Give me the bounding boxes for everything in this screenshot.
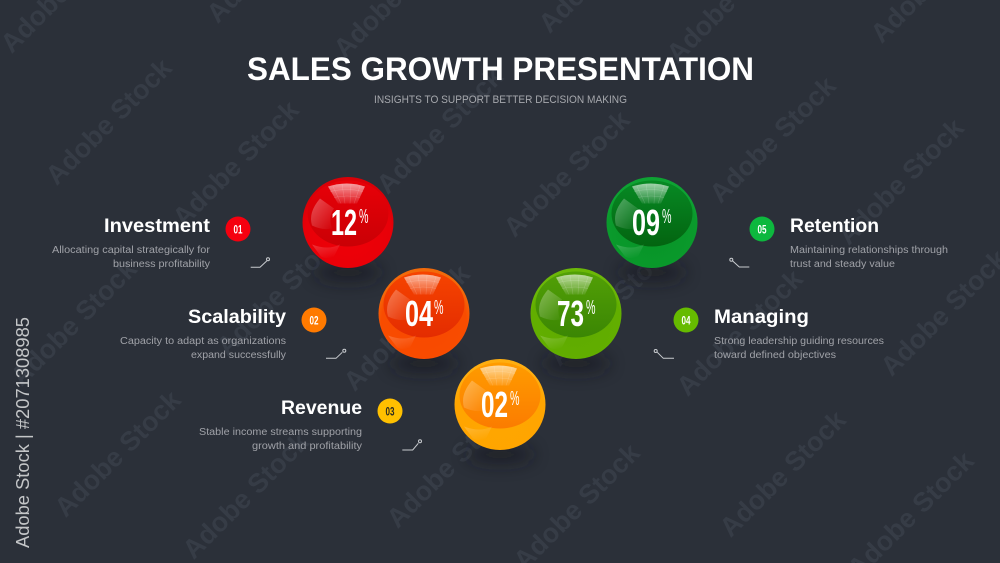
text: retention description <box>790 245 948 270</box>
badge 05 <box>750 216 774 242</box>
sphere: orange 04%: 04 <box>405 293 433 334</box>
sphere: dark green 09%: % <box>662 206 672 228</box>
watermark pattern: Adobe Stock <box>338 258 476 397</box>
subtitle: INSIGHTS TO SUPPORT BETTER DECISION MAKING <box>374 94 627 106</box>
connector 04 <box>654 350 674 358</box>
connector 02 <box>326 349 346 358</box>
sphere: dark green 09% <box>606 177 698 282</box>
badge 03 <box>378 398 402 424</box>
sphere: amber 02%: 02 <box>481 384 508 425</box>
text: managing description <box>714 336 884 361</box>
watermark pattern: Adobe Stock <box>498 104 636 243</box>
watermark pattern: Adobe Stock <box>543 233 681 372</box>
panel: investment <box>52 216 270 270</box>
heading: managing: Managing <box>714 307 809 328</box>
watermark pattern: Adobe Stock <box>177 426 315 563</box>
text: investment description: Allocating capital strategically for <box>52 245 211 256</box>
badge 05: 05 <box>758 222 767 236</box>
sphere: amber 02%: % <box>510 388 520 410</box>
watermark pattern: Adobe Stock <box>371 61 509 200</box>
sphere: lime 73% <box>530 268 622 374</box>
text: scalability description: Capacity to adapt as organizations <box>120 336 286 347</box>
heading: revenue: Revenue <box>281 398 362 419</box>
watermark pattern: Adobe Stock <box>40 52 178 191</box>
text: scalability description <box>120 336 286 361</box>
badge 03: 03 <box>386 404 395 418</box>
text: revenue description: growth and profitability <box>252 441 362 452</box>
panel: retention <box>730 216 948 270</box>
connector 01 <box>251 258 270 267</box>
sphere: red 12%: 12 <box>331 202 357 243</box>
heading: retention: Retention <box>790 216 879 237</box>
sphere: orange 04% <box>378 268 470 374</box>
sphere: amber 02% <box>454 359 546 464</box>
text: managing description: toward defined objectives <box>714 350 836 361</box>
watermark pattern: Adobe Stock <box>832 112 970 251</box>
stock id side label: Adobe Stock | #2071308985 <box>13 317 33 548</box>
watermark pattern: Adobe Stock <box>167 94 305 233</box>
sphere: red 12%: % <box>359 206 369 228</box>
text: retention description: Maintaining relationships through <box>790 245 948 256</box>
title: SALES GROWTH PRESENTATION <box>247 51 754 87</box>
badge 04: 04 <box>682 314 691 328</box>
text: managing description: Strong leadership guiding resources <box>714 336 884 347</box>
watermark pattern: Adobe Stock <box>714 404 852 543</box>
text: investment description: business profitability <box>113 259 210 270</box>
badge 01 <box>226 216 250 242</box>
watermark pattern: Adobe Stock <box>381 395 519 534</box>
text: investment description <box>52 245 211 270</box>
panel: managing <box>654 307 884 361</box>
sphere: dark green 09%: 09 <box>632 202 660 243</box>
watermark pattern: Adobe Stock <box>671 263 809 402</box>
connector 03 <box>402 440 422 450</box>
badge 02: 02 <box>310 314 319 328</box>
connector 05 <box>730 258 749 267</box>
sphere: lime 73%: 73 <box>557 293 584 334</box>
sphere: orange 04%: % <box>434 297 444 319</box>
text: scalability description: expand successfully <box>191 350 286 361</box>
badge 04 <box>674 308 698 332</box>
heading: investment: Investment <box>104 216 211 237</box>
badge 02 <box>302 308 326 332</box>
text: revenue description: Stable income streams supporting <box>199 427 362 438</box>
text: retention description: trust and steady value <box>790 259 895 270</box>
watermark pattern: Adobe Stock <box>211 223 349 362</box>
sphere: lime 73%: % <box>586 297 596 319</box>
panel: scalability <box>120 307 346 361</box>
watermark pattern: Adobe Stock <box>704 70 842 209</box>
badge 01: 01 <box>234 222 243 236</box>
panel: revenue <box>199 398 422 452</box>
sphere: red 12% <box>302 177 394 282</box>
watermark pattern: Adobe Stock <box>5 253 143 392</box>
heading: scalability: Scalability <box>188 307 286 328</box>
watermark pattern: Adobe Stock <box>49 384 187 523</box>
text: revenue description <box>199 427 362 452</box>
